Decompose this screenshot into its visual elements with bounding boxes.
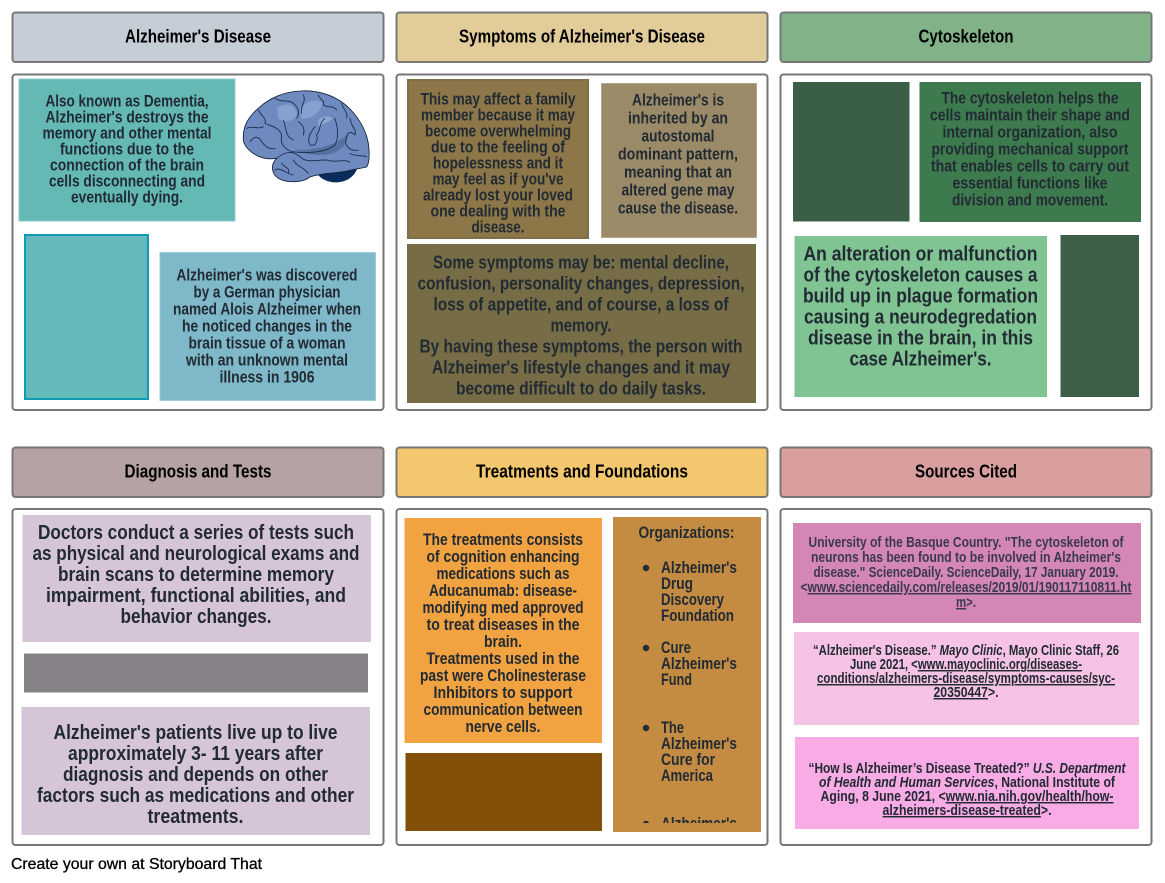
text block: symptoms list: become difficult to do daily tasks.	[456, 378, 706, 398]
text block: discovery: Alzheimer's was discovered	[176, 266, 358, 284]
empty grey bar	[24, 654, 368, 692]
list: organization names: Alzheimer's	[661, 655, 737, 673]
list: organization names: Cure	[661, 639, 691, 657]
citation: National Institute of Aging: alzheimers-disease-treated>.	[882, 803, 1052, 819]
text block: treatments: communication between	[424, 701, 582, 719]
text block: family impact: hopelessness and it	[433, 154, 563, 172]
text block: cytoskeleton function: The cytoskeleton helps the	[942, 90, 1118, 108]
text block: treatments: past were Cholinesterase	[420, 667, 586, 685]
heading: Sources Cited	[780, 448, 1152, 497]
citation: ScienceDaily	[793, 523, 1141, 623]
text block: cytoskeleton function: essential functions like	[952, 174, 1108, 192]
panel: Treatments and Foundations	[396, 509, 768, 845]
citation: ScienceDaily: m>.	[956, 595, 976, 611]
text block: malfunction: case Alzheimer's.	[850, 348, 992, 370]
text block: tests	[22, 515, 371, 642]
text block: symptoms list: memory.	[550, 316, 612, 336]
text block: cytoskeleton function: providing mechanical support	[932, 140, 1129, 158]
list: organization names: Fund	[661, 671, 692, 689]
text block: symptoms list: Some symptoms may be: mental decline,	[433, 252, 729, 272]
text block: family impact: member because it may	[421, 106, 575, 124]
text block: treatments: The treatments consists	[423, 531, 583, 549]
citation: Mayo Clinic	[794, 632, 1139, 725]
text block: cytoskeleton function	[920, 82, 1141, 222]
citation: Mayo Clinic: “Alzheimer's Disease.” Mayo Clinic, Mayo Clinic Staff, 26	[813, 643, 1119, 659]
citation: Mayo Clinic: June 2021, <www.mayoclinic.org/diseases-	[850, 657, 1082, 673]
text block: symptoms list	[407, 244, 756, 403]
text block: malfunction: An alteration or malfunction	[804, 242, 1038, 266]
list: organization names: Foundation	[661, 607, 734, 625]
text block: discovery	[160, 252, 376, 400]
text block: organizations: Organizations:	[638, 524, 734, 542]
text block: treatments: medications such as	[436, 565, 570, 583]
text block: life expectancy: factors such as medications and other	[37, 784, 354, 807]
text block: life expectancy: treatments.	[148, 805, 244, 828]
text block: inheritance	[602, 84, 756, 238]
heading: Treatments and Foundations	[396, 448, 768, 497]
text block: inheritance: autostomal	[642, 128, 714, 146]
text block: also known as dementia: cells disconnecting and	[49, 172, 205, 190]
heading: Treatments and Foundations: Treatments and Foundations	[476, 462, 688, 482]
text block: discovery: illness in 1906	[220, 368, 314, 386]
text block: family impact: one dealing with the	[430, 202, 566, 220]
list: organization names: Drug	[661, 575, 693, 593]
text block: also known as dementia: functions due to the	[60, 140, 194, 158]
text block: inheritance: inherited by an	[628, 110, 728, 128]
text block: family impact: become overwhelming	[425, 122, 571, 140]
list: organization names	[643, 559, 737, 833]
text block: life expectancy: diagnosis and depends on other	[63, 763, 328, 786]
heading: Cytoskeleton: Cytoskeleton	[918, 26, 1014, 46]
text block: symptoms list: confusion, personality changes, depression,	[418, 274, 744, 294]
text block: discovery: named Alois Alzheimer when	[173, 300, 361, 318]
citation: National Institute of Aging: Aging, 8 June 2021, <www.nia.nih.gov/health/how-	[820, 789, 1114, 805]
text block: inheritance: cause the disease.	[618, 200, 738, 218]
panel: Cytoskeleton	[780, 74, 1152, 410]
list: organization names: Cure for	[661, 751, 716, 769]
citation: National Institute of Aging: “How Is Alzheimer’s Disease Treated?” U.S. Department	[808, 761, 1126, 777]
empty dark green box	[1060, 235, 1139, 397]
text block: inheritance: meaning that an	[624, 164, 732, 182]
list: organization names: Discovery	[661, 591, 724, 609]
text block: life expectancy	[22, 707, 370, 835]
text block: discovery: with an unknown mental	[185, 352, 348, 370]
footer credit: Create your own at Storyboard That	[11, 856, 263, 873]
text block: inheritance: altered gene may	[622, 182, 734, 200]
empty brown box	[406, 753, 602, 831]
citation: National Institute of Aging	[795, 737, 1139, 829]
text block: discovery: brain tissue of a woman	[188, 334, 346, 352]
text block: cytoskeleton function: that enables cells to carry out	[931, 158, 1129, 176]
text block: also known as dementia	[19, 79, 235, 221]
list: organization names: Alzheimer's	[661, 735, 737, 753]
text block: organizations	[613, 517, 761, 833]
text block: discovery: by a German physician	[194, 284, 340, 302]
text block: inheritance: dominant pattern,	[618, 146, 738, 164]
text block: malfunction: disease in the brain, in this	[808, 326, 1033, 350]
text block: cytoskeleton function: internal organization, also	[942, 124, 1118, 142]
heading: Alzheimer's Disease: Alzheimer's Disease	[125, 26, 271, 46]
text block: treatments	[404, 518, 602, 743]
text block: life expectancy: Alzheimer's patients live up to live	[54, 721, 338, 744]
list: organization names: Alzheimer's	[661, 815, 737, 833]
panel: Diagnosis and Tests	[12, 509, 384, 845]
text block: symptoms list: loss of appetite, and of course, a loss of	[434, 294, 729, 314]
text block: treatments: brain.	[484, 633, 522, 651]
text block: family impact	[408, 80, 588, 238]
text block: malfunction: build up in plague formation	[803, 284, 1038, 308]
panel: Sources Cited	[780, 509, 1152, 845]
text block: family impact: This may affect a family	[420, 90, 576, 108]
text block: treatments: Treatments used in the	[426, 650, 580, 668]
heading: Alzheimer's Disease	[12, 12, 384, 62]
text block: discovery: he noticed changes in the	[182, 318, 352, 336]
text block: malfunction: causing a neurodegredation	[804, 306, 1037, 328]
text block: also known as dementia: connection of the brain	[50, 156, 204, 174]
empty teal box	[25, 235, 148, 399]
text block: treatments: nerve cells.	[466, 718, 540, 736]
empty dark green box	[793, 82, 910, 222]
text block: tests: Doctors conduct a series of tests such	[38, 521, 354, 544]
text block: malfunction: of the cytoskeleton causes a	[804, 264, 1038, 286]
text block: treatments: to treat diseases in the	[426, 616, 580, 634]
text block: treatments: Aducanumab: disease-	[429, 582, 577, 600]
text block: family impact: may feel as if you've	[432, 170, 564, 188]
text block: inheritance: Alzheimer's is	[632, 92, 724, 110]
text block: tests: as physical and neurological exams and	[32, 542, 360, 565]
text block: family impact: disease.	[472, 218, 524, 236]
text block: treatments: modifying med approved	[422, 599, 584, 617]
heading: Diagnosis and Tests: Diagnosis and Tests	[124, 462, 272, 482]
heading: Symptoms of Alzheimer's Disease	[396, 12, 768, 62]
text block: also known as dementia: Alzheimer's destroys the	[46, 108, 208, 126]
text block: cytoskeleton function: cells maintain their shape and	[930, 106, 1130, 124]
text block: symptoms list: By having these symptoms, the person with	[420, 336, 742, 356]
text block: also known as dementia: Also known as Dementia,	[46, 92, 208, 110]
heading: Symptoms of Alzheimer's Disease: Symptoms of Alzheimer's Disease	[459, 26, 705, 46]
text block: cytoskeleton function: division and movement.	[952, 192, 1108, 210]
text block: tests: brain scans to determine memory	[58, 563, 334, 586]
heading: Sources Cited: Sources Cited	[915, 462, 1017, 482]
heading: Cytoskeleton	[780, 12, 1152, 62]
text block: malfunction	[794, 236, 1047, 397]
citation: National Institute of Aging: of Health and Human Services, National Institute of	[819, 775, 1115, 791]
text block: family impact: due to the feeling of	[431, 138, 565, 156]
list: organization names: America	[661, 767, 714, 785]
text block: family impact: already lost your loved	[423, 186, 573, 204]
text block: also known as dementia: memory and other mental	[42, 124, 212, 142]
text block: treatments: Inhibitors to support	[434, 684, 573, 702]
text block: tests: behavior changes.	[120, 605, 272, 628]
text block: treatments: of cognition enhancing	[426, 548, 580, 566]
citation: Mayo Clinic: 20350447>.	[934, 685, 998, 701]
icon: brain	[243, 91, 369, 182]
list: organization names: Alzheimer's	[661, 559, 737, 577]
text block: symptoms list: Alzheimer's lifestyle changes and it may	[432, 358, 730, 378]
text block: tests: impairment, functional abilities, and	[46, 584, 346, 607]
text block: also known as dementia: eventually dying.	[71, 188, 183, 206]
heading: Diagnosis and Tests	[12, 448, 384, 497]
panel: Alzheimer's Disease	[12, 74, 384, 410]
text block: life expectancy: approximately 3- 11 years after	[68, 742, 323, 765]
list: organization names: The	[661, 719, 684, 737]
panel: Symptoms	[396, 74, 768, 410]
